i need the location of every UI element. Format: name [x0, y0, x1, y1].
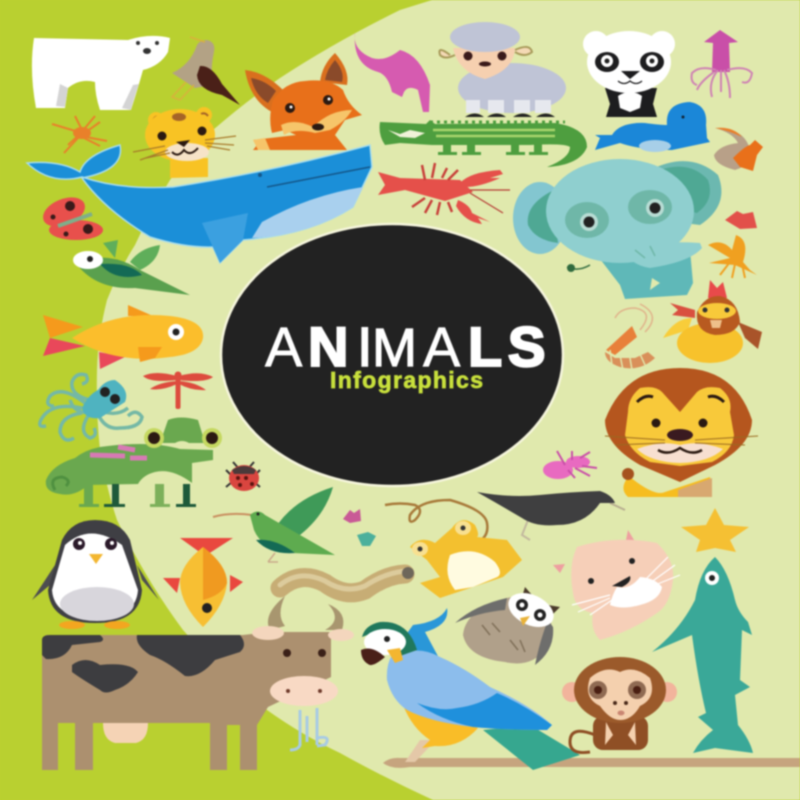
- icon: panda: [583, 31, 675, 117]
- icon: ladybug: [226, 462, 260, 491]
- title: ANIMALS: A: [423, 315, 461, 378]
- icon: teal shark: [652, 557, 753, 753]
- icon: penguin: [32, 520, 159, 629]
- icon: monkey: [562, 657, 677, 753]
- title: ANIMALS: L: [468, 315, 502, 378]
- icon: hummingbird: [213, 487, 335, 562]
- icon: pink weasel: [355, 32, 430, 112]
- title: ANIMALS: N: [308, 315, 348, 378]
- icon: polar bear: [32, 36, 170, 110]
- icon: tiger cub: [133, 107, 236, 178]
- icon: blue seal: [595, 102, 710, 152]
- icon: orange insect: [708, 235, 757, 278]
- icon: yellow fish: [43, 305, 203, 369]
- icon: elephant: [513, 159, 721, 299]
- icon: fox: [245, 53, 362, 150]
- central black circle: [221, 224, 563, 486]
- icon: red dragonfly: [143, 372, 213, 409]
- icon: parrot: [361, 608, 580, 770]
- icon: cow: [42, 596, 354, 770]
- icon: pink cat: [553, 530, 680, 640]
- icon: tiny pink and teal insects: [343, 509, 376, 546]
- icon: teal octopus: [40, 374, 142, 440]
- icon: red heart bug: [725, 211, 757, 229]
- icon: red butterfly: [39, 192, 103, 240]
- icon: worm: [280, 567, 414, 593]
- icon: squirrel: [714, 128, 763, 171]
- icon: green bird flying: [73, 240, 190, 295]
- icon: owl: [455, 586, 560, 665]
- icon: green chameleon: [46, 418, 222, 507]
- icon: blue jellyfish strands: [290, 708, 327, 750]
- icon: rooster: [663, 280, 762, 363]
- title: ANIMALS: S: [508, 315, 545, 378]
- title: ANIMALS: I: [357, 315, 373, 378]
- icon: lion: [605, 368, 758, 497]
- subtitle: Infographics: Infographics: [330, 367, 483, 393]
- branch: [383, 758, 800, 768]
- icon: brown bird: [172, 37, 240, 105]
- icon: pink spider: [543, 451, 597, 479]
- icon: spider orange: [52, 116, 107, 153]
- icon: magenta squid: [692, 30, 752, 98]
- icon: shrimp: [605, 304, 655, 370]
- icon: crocodile: [380, 120, 587, 167]
- icon: yellow frog with rope: [385, 500, 522, 598]
- icon: orange fish vertical: [163, 538, 243, 627]
- title: ANIMALS: M: [372, 318, 417, 378]
- icon: blackbird: [477, 491, 625, 540]
- icon: blue whale: [27, 145, 372, 263]
- icon: red lobster: [378, 163, 510, 224]
- icon: yellow star: [681, 508, 749, 552]
- icon: sheep: [439, 22, 566, 117]
- title: ANIMALS: A: [265, 315, 303, 378]
